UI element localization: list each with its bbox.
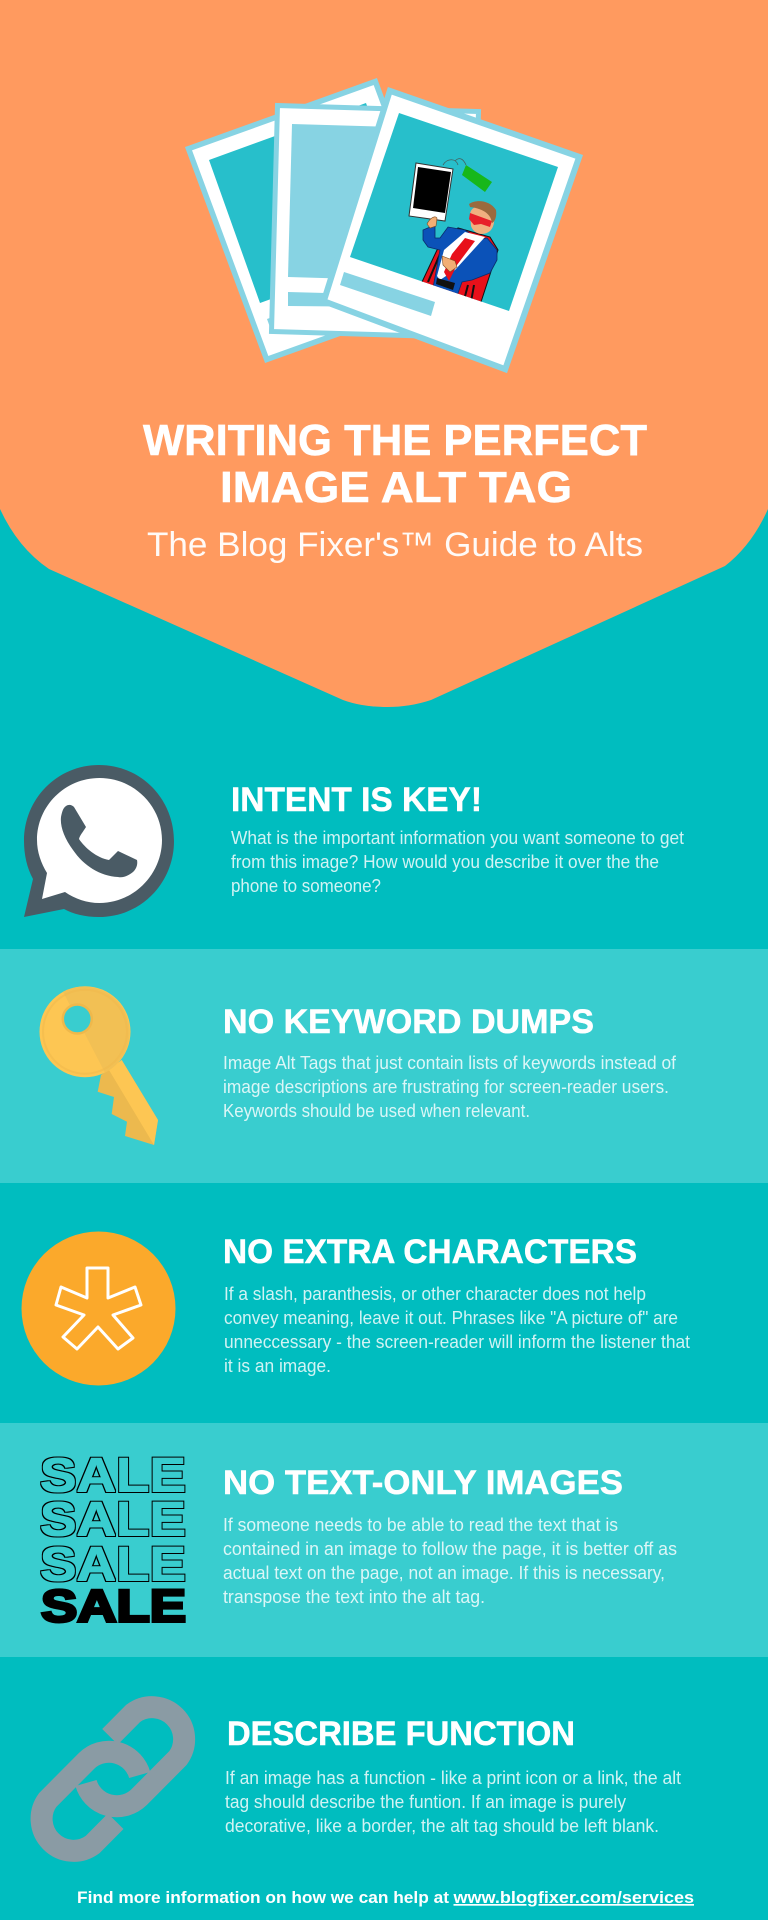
icon: phone speech bubble [24, 765, 174, 917]
photo: back left [188, 82, 454, 360]
icon: price tag [443, 159, 492, 192]
icon: sale text stack: SALE [40, 1450, 186, 1502]
body text: unneccessary - the screen-reader will inform the listener that [224, 1332, 690, 1352]
heading: NO TEXT-ONLY IMAGES [223, 1464, 623, 1502]
title [143, 416, 647, 512]
belt [436, 278, 455, 290]
panel: no text-only images [0, 1423, 768, 1657]
shirt [437, 232, 485, 280]
hand [442, 256, 457, 272]
heading: DESCRIBE FUNCTION [227, 1715, 575, 1753]
footer call to action: Find more information on how we can help at [77, 1888, 449, 1907]
body text [231, 828, 684, 896]
panel: intent is key [24, 765, 684, 917]
body text: decorative, like a border, the alt tag should be left blank. [225, 1816, 659, 1836]
body text: phone to someone? [231, 876, 381, 896]
panel: describe function [42, 1707, 681, 1851]
cape [422, 228, 498, 305]
panel: no keyword dumps [0, 949, 768, 1183]
icon: sale text stack [40, 1450, 186, 1632]
jacket [423, 225, 497, 296]
body text: What is the important information you want someone to get [231, 828, 684, 848]
body text [225, 1768, 681, 1836]
body text [224, 1284, 690, 1376]
body text: If an image has a function - like a print icon or a link, the alt [225, 1768, 681, 1788]
body text: If a slash, paranthesis, or other character does not help [224, 1284, 646, 1304]
body text: actual text on the page, not an image. If this is necessary, [223, 1563, 665, 1583]
body text: convey meaning, leave it out. Phrases like "A picture of" are [224, 1308, 678, 1328]
subtitle: The Blog Fixer's™ Guide to Alts [147, 526, 643, 564]
body text: If someone needs to be able to read the text that is [223, 1515, 618, 1535]
character: superhero holding a tablet [409, 159, 498, 305]
icon: chain link [42, 1707, 184, 1851]
illustration: stack of photos [188, 82, 579, 369]
body text: image descriptions are frustrating for screen-reader users. [223, 1077, 669, 1097]
body text: it is an image. [224, 1356, 331, 1376]
photo: middle [272, 106, 478, 338]
heading: NO EXTRA CHARACTERS [223, 1233, 637, 1271]
heading: INTENT IS KEY! [231, 781, 482, 819]
heading: NO KEYWORD DUMPS [223, 1003, 594, 1041]
title: IMAGE ALT TAG [220, 463, 572, 512]
icon: key [40, 986, 158, 1145]
body text: contained in an image to follow the page, it is better off as [223, 1539, 677, 1559]
icon: asterisk in circle [22, 1232, 176, 1386]
tie [444, 238, 475, 281]
header panel [0, 0, 768, 707]
body text: tag should describe the funtion. If an image is purely [225, 1792, 626, 1812]
body text [223, 1515, 677, 1607]
body text: Image Alt Tags that just contain lists of keywords instead of [223, 1053, 677, 1073]
footer call to action [77, 1888, 694, 1907]
band [0, 949, 768, 1183]
panel: no extra characters [22, 1232, 690, 1386]
footer call to action: www.blogfixer.com/services [452, 1888, 694, 1907]
icon: tablet [409, 163, 453, 221]
body text: Keywords should be used when relevant. [223, 1101, 530, 1121]
photo: front [324, 91, 579, 369]
band [0, 1423, 768, 1657]
head [469, 201, 496, 234]
title: WRITING THE PERFECT [143, 416, 647, 465]
icon: sale text stack: SALE [40, 1538, 186, 1592]
body text [223, 1053, 677, 1121]
body text: from this image? How would you describe it over the the [231, 852, 659, 872]
icon: sale text stack: SALE [41, 1580, 186, 1632]
icon: sale text stack: SALE [40, 1494, 186, 1546]
body text: transpose the text into the alt tag. [223, 1587, 485, 1607]
